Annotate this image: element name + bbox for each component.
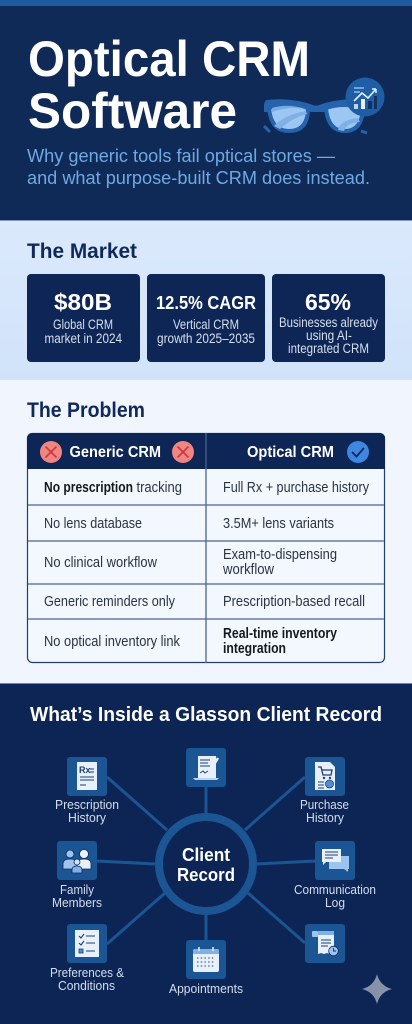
node: client notes	[186, 748, 226, 787]
heading: the market: The Market	[27, 240, 137, 263]
icon: glasses with chart badge	[264, 78, 384, 133]
panel: hero header	[0, 0, 412, 220]
header: generic	[40, 441, 194, 463]
stat card: CAGR: Vertical CRM	[173, 317, 239, 332]
stat card: 65 percent: Businesses already	[279, 315, 378, 330]
node: purchase history: Purchase	[300, 797, 349, 812]
stat card: 80B: $80B	[54, 289, 112, 315]
subtitle: and what purpose-built CRM does instead.	[27, 168, 370, 188]
subtitle	[27, 146, 370, 188]
stat card: 80B: market in 2024	[44, 331, 122, 346]
row 5: Real-time inventory	[223, 626, 337, 642]
stat card: 65 percent: integrated CRM	[288, 341, 369, 356]
stat card: CAGR: growth 2025–2035	[157, 331, 255, 346]
panel: the market	[0, 220, 412, 380]
title: Software	[28, 83, 237, 139]
icon: sparkle watermark	[362, 974, 392, 1004]
row 3: Exam-to-dispensing	[223, 547, 337, 563]
row 4: Generic reminders only	[44, 594, 176, 610]
hub: client record	[159, 817, 253, 911]
row 2	[44, 516, 334, 532]
node: communication log: Log	[325, 895, 345, 910]
header: generic: Generic CRM	[70, 444, 161, 461]
subtitle: Why generic tools fail optical stores —	[27, 146, 335, 166]
row 1	[44, 480, 370, 496]
title	[28, 31, 310, 139]
row 1: No prescription	[44, 480, 133, 496]
row 3	[44, 547, 337, 578]
node: prescription history	[55, 757, 119, 825]
stat card: 65 percent: 65%	[305, 289, 351, 315]
node: communication log: Communication	[294, 882, 376, 897]
row 2: No lens database	[44, 516, 142, 532]
hub: client record: Client	[182, 844, 230, 865]
stat card: CAGR: 12.5% CAGR	[156, 293, 256, 313]
node: preferences and conditions	[50, 924, 124, 993]
node: communication log	[294, 841, 376, 910]
heading: client record: What’s Inside a Glasson Client Record	[30, 703, 382, 726]
header: optical: Optical CRM	[247, 444, 334, 461]
hub connectors	[97, 777, 315, 944]
node: prescription history: Rx	[79, 765, 91, 775]
title: Optical CRM	[28, 31, 310, 87]
node: family members: Members	[52, 895, 102, 910]
row 3: workflow	[222, 562, 275, 578]
node: appointments: Appointments	[169, 981, 243, 996]
stat card: 65 percent: using AI-	[306, 328, 352, 343]
node: visit history	[305, 924, 345, 963]
header: optical	[247, 441, 369, 463]
row 1: Full Rx + purchase history	[223, 480, 370, 496]
node: appointments	[169, 940, 243, 996]
row 5	[44, 626, 337, 657]
stat card: 80B: Global CRM	[53, 317, 113, 332]
row 4	[44, 594, 365, 610]
node: family members: Family	[60, 882, 94, 897]
node: purchase history: History	[306, 810, 344, 825]
heading: the problem: The Problem	[27, 399, 145, 422]
stat card: CAGR	[147, 274, 265, 362]
node: purchase history	[300, 757, 349, 825]
stat card: 80B	[27, 274, 140, 362]
comparison table	[27, 433, 385, 663]
stat card: 65 percent	[272, 274, 385, 362]
row 5: No optical inventory link	[44, 634, 181, 650]
row 1: tracking	[136, 480, 182, 496]
row 2: 3.5M+ lens variants	[223, 516, 334, 532]
hub: client record: Record	[177, 864, 235, 885]
row 3: No clinical workflow	[44, 555, 158, 571]
panel: client record	[0, 683, 412, 1024]
node: prescription history: Prescription	[55, 797, 119, 812]
node: preferences and conditions: Preferences &	[50, 965, 124, 980]
panel: the problem	[0, 380, 412, 683]
node: prescription history: History	[68, 810, 106, 825]
node: preferences and conditions: Conditions	[58, 978, 115, 993]
row 4: Prescription-based recall	[223, 594, 365, 610]
row 5: integration	[223, 641, 286, 657]
node: family members	[52, 841, 102, 910]
